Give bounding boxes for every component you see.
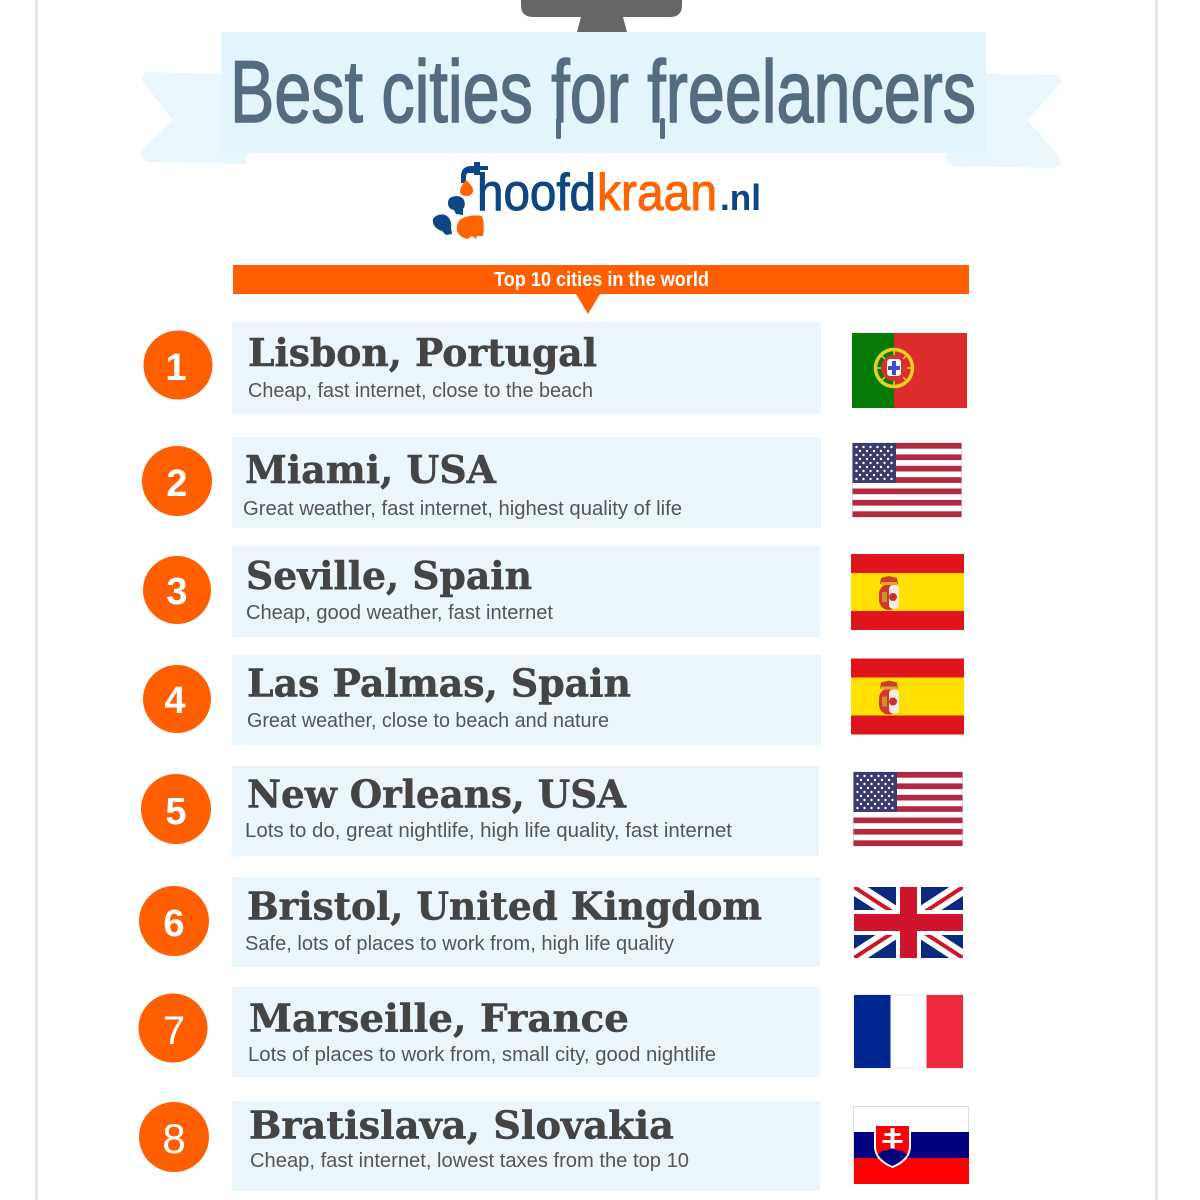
city 6: Bristol: 6 <box>163 903 185 945</box>
city 7: Marseille: Marseille, France <box>249 996 629 1040</box>
icon: navy head <box>448 196 465 215</box>
logo text: kraan <box>597 164 717 222</box>
logo text: hoofd <box>477 164 596 222</box>
flag: Portugal <box>852 333 967 408</box>
icon: faucet <box>461 162 488 183</box>
city 3: Seville <box>143 546 964 637</box>
logo text: .nl <box>720 177 761 218</box>
city 5: New Orleans: 5 <box>165 791 187 833</box>
city 6: Bristol: Safe, lots of places to work from, high life quality <box>245 933 674 955</box>
city 5: New Orleans <box>141 766 962 856</box>
section header bar <box>233 265 969 314</box>
city 2: Miami <box>142 437 962 528</box>
city 3: Seville: 3 <box>166 571 188 613</box>
city 4: Las Palmas: Great weather, close to beach and nature <box>247 710 609 732</box>
city 5: New Orleans: Lots to do, great nightlife, high life quality, fast internet <box>245 820 732 842</box>
city 8: Bratislava: Bratislava, Slovakia <box>249 1102 674 1148</box>
flag: Spain <box>851 658 964 734</box>
flag: United Kingdom <box>854 887 963 958</box>
flag: USA <box>854 772 962 846</box>
city 3: Seville: Cheap, good weather, fast internet <box>246 602 553 624</box>
city 2: Miami: Miami, USA <box>245 447 497 492</box>
city 8: Bratislava: Cheap, fast internet, lowest taxes from the top 10 <box>250 1150 689 1172</box>
city 1: Lisbon: Lisbon, Portugal <box>248 330 597 375</box>
city 1: Lisbon: Cheap, fast internet, close to the beach <box>248 380 593 402</box>
city 4: Las Palmas: 4 <box>164 680 186 722</box>
city 8: Bratislava <box>139 1101 969 1191</box>
city 7: Marseille: 7 <box>163 1009 185 1053</box>
icon: orange drop <box>460 180 473 196</box>
city 4: Las Palmas <box>143 655 964 745</box>
icon: orange head <box>457 215 484 239</box>
title: Best cities for freelancers <box>230 42 976 141</box>
icon: navy head small <box>433 214 452 235</box>
title banner <box>141 32 1062 168</box>
city 8: Bratislava: 8 <box>162 1115 186 1162</box>
city 5: New Orleans: New Orleans, USA <box>247 772 626 816</box>
flag: France <box>854 995 963 1068</box>
city 2: Miami: Great weather, fast internet, highest quality of life <box>243 498 682 520</box>
city 1: Lisbon <box>144 322 967 414</box>
icon: monitor stand <box>521 0 682 32</box>
city 6: Bristol: Bristol, United Kingdom <box>247 884 762 928</box>
flag: Slovakia <box>854 1106 969 1184</box>
flag: USA <box>852 443 962 517</box>
city 3: Seville: Seville, Spain <box>246 553 532 598</box>
section header text: Top 10 cities in the world <box>494 269 709 291</box>
city 7: Marseille <box>138 987 963 1077</box>
city 7: Marseille: Lots of places to work from, small city, good nightlife <box>248 1044 716 1066</box>
logo: hoofdkraan.nl <box>433 162 761 239</box>
city 1: Lisbon: 1 <box>165 347 187 389</box>
city 2: Miami: 2 <box>166 463 188 505</box>
city 6: Bristol <box>139 877 963 967</box>
flag: Spain <box>851 554 964 630</box>
city 4: Las Palmas: Las Palmas, Spain <box>247 660 631 706</box>
